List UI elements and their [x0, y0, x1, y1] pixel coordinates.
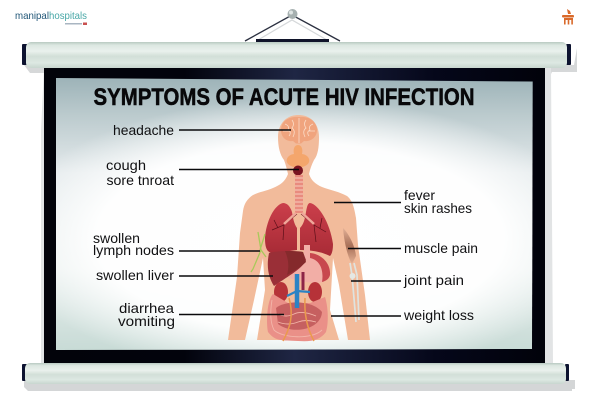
ureters [283, 298, 314, 341]
projection screen [56, 78, 533, 350]
top roller shadow [24, 48, 577, 76]
kidneys [274, 282, 322, 302]
muscle [343, 228, 356, 264]
lungs [265, 203, 333, 256]
symptom labels: skin rashes [404, 200, 472, 216]
bottom roller shadow [24, 380, 575, 391]
brain [281, 117, 317, 144]
logo: Manipal Hospitals: hospitals [49, 10, 87, 22]
symptom labels: muscle pain [404, 240, 478, 256]
logo: Manipal Hospitals: manipal [15, 10, 49, 22]
screen frame [44, 66, 545, 364]
stomach [288, 245, 330, 283]
pointer lines [179, 130, 401, 316]
symptom labels: lymph nodes [93, 242, 174, 258]
symptom labels: joint pain [403, 272, 464, 288]
intestines [267, 294, 328, 341]
symptom labels: weight loss [403, 307, 474, 323]
title: SYMPTOMS OF ACUTE HIV INFECTION [94, 84, 474, 111]
symptom labels: cough [106, 157, 146, 173]
trachea [295, 175, 303, 213]
symptom labels [93, 122, 478, 329]
human body illustration [228, 115, 370, 341]
symptom labels: vomiting [118, 313, 175, 329]
symptom labels: swollen liver [96, 267, 174, 283]
hanger wire and hook [245, 9, 340, 43]
icon: orange emblem [562, 9, 574, 24]
symptom labels: fever [404, 187, 435, 203]
bottom roller [22, 363, 569, 384]
liver [268, 251, 306, 286]
symptom labels: headache [113, 122, 174, 138]
symptom labels: sore tnroat [106, 172, 174, 188]
symptom labels: swollen [93, 230, 140, 246]
symptom labels: diarrhea [119, 300, 174, 316]
nasal cavity and throat [287, 145, 309, 176]
body silhouette [228, 115, 370, 340]
logo: Manipal Hospitals [15, 10, 87, 25]
side shadows of screen [41, 68, 553, 363]
top roller [22, 42, 571, 68]
lymph nodes [251, 232, 266, 272]
blood vessels [287, 272, 310, 308]
arm bones [350, 263, 359, 322]
